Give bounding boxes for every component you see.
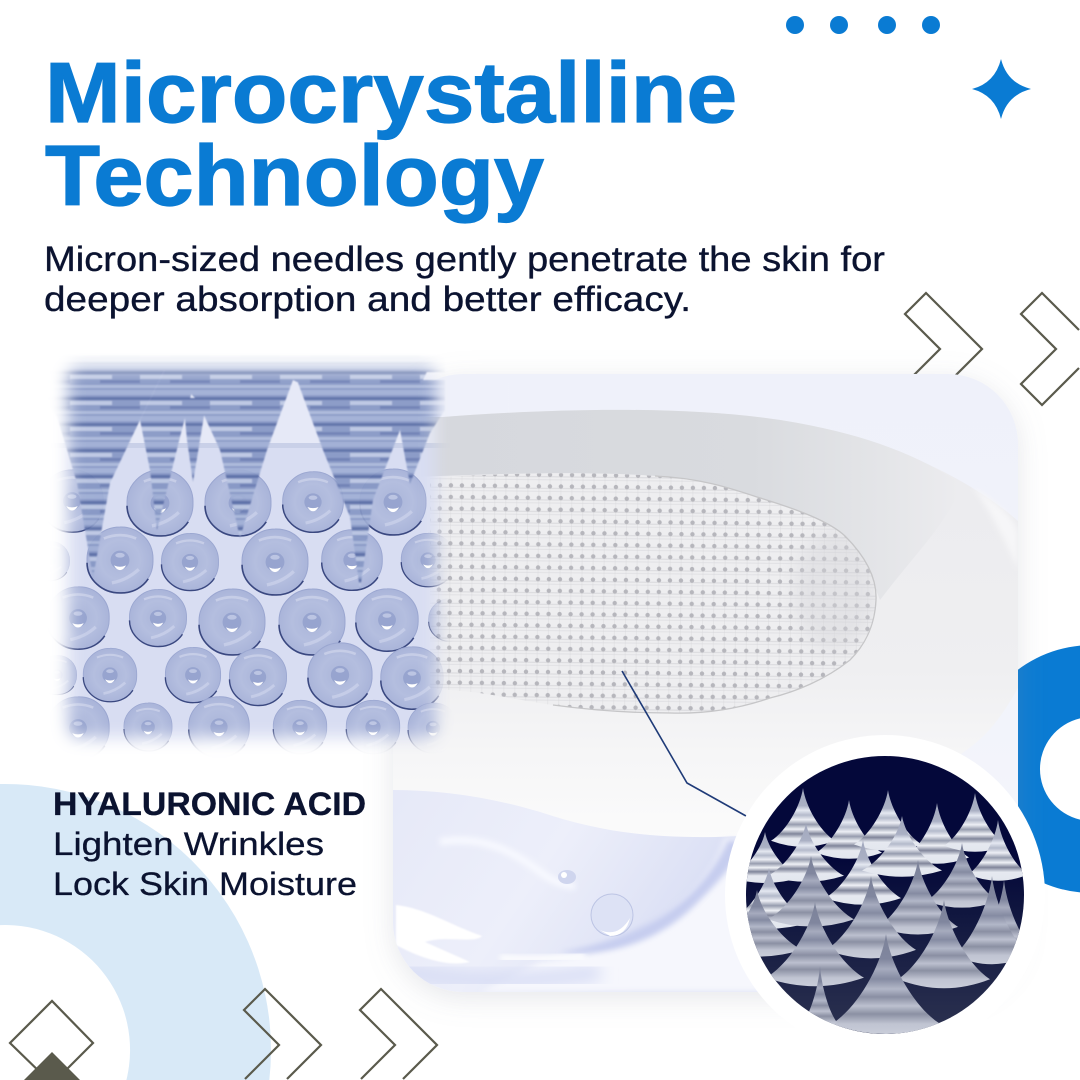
decoration: bottom left diamond xyxy=(10,1001,93,1080)
grey band of insole xyxy=(434,410,922,600)
patch outline xyxy=(553,476,876,713)
subtitle text: deeper absorption and better efficacy. xyxy=(44,280,691,319)
microneedles xyxy=(40,355,445,590)
microneedle patch texture xyxy=(430,470,880,720)
label: hyaluronic acid: Lighten Wrinkles xyxy=(53,826,324,862)
insole right rim highlight xyxy=(986,500,1016,550)
subtitle text xyxy=(44,240,885,319)
panel: insole photo xyxy=(393,374,1018,992)
white ring of circle inset xyxy=(725,735,1045,1055)
middle row cones xyxy=(728,816,1028,929)
illustration: needles penetrating cells xyxy=(55,356,448,751)
front row cones xyxy=(748,856,1020,1034)
skin cells xyxy=(56,468,448,750)
decoration: bottom chevrons xyxy=(244,989,437,1079)
title: Microcrystalline xyxy=(45,46,737,141)
decoration: top dots xyxy=(786,16,940,34)
circle inset: microneedle close-up xyxy=(746,756,1024,1034)
decoration: top right chevrons xyxy=(905,293,1079,405)
label: hyaluronic acid: Lock Skin Moisture xyxy=(53,866,357,902)
title: Technology xyxy=(45,129,544,224)
back row cones xyxy=(746,788,994,883)
subtitle text: Micron-sized needles gently penetrate the skin for xyxy=(44,240,885,279)
title xyxy=(45,46,737,224)
label: hyaluronic acid: HYALURONIC ACID xyxy=(53,786,366,822)
insole body xyxy=(442,468,1018,698)
label: hyaluronic acid xyxy=(53,786,366,902)
icon: four-point star xyxy=(972,59,1031,119)
upper skin layer xyxy=(130,374,434,443)
decoration: blue ring right xyxy=(968,646,1080,892)
callout leader line xyxy=(622,671,746,816)
water splash xyxy=(393,790,770,992)
water droplets xyxy=(558,870,633,936)
decoration: pale blue ring bottom left xyxy=(0,784,271,1080)
